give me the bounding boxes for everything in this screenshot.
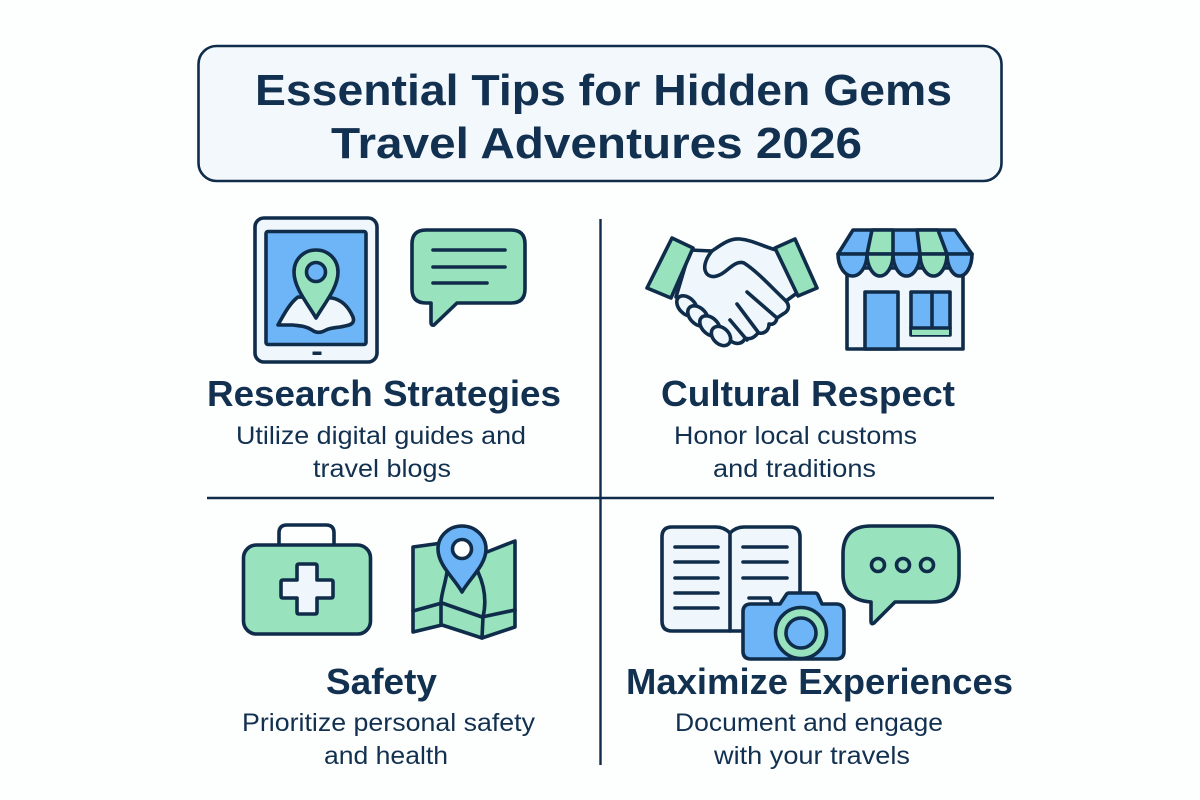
description: cultural respect: and traditions bbox=[713, 455, 876, 483]
icon: speech bubble with dots bbox=[843, 526, 959, 624]
description: cultural respect bbox=[674, 422, 917, 483]
icon: camera bbox=[743, 593, 844, 659]
icon: first aid kit bbox=[244, 525, 370, 634]
description: maximize experiences bbox=[675, 709, 943, 770]
icon: tablet with map pin bbox=[255, 218, 377, 362]
icon: handshake bbox=[647, 238, 817, 349]
description: research strategies bbox=[236, 422, 526, 483]
icon: speech bubble with lines bbox=[412, 230, 525, 325]
heading: maximize experiences: Maximize Experiences bbox=[626, 661, 1013, 702]
description: cultural respect: Honor local customs bbox=[674, 422, 917, 450]
description: maximize experiences: Document and engage bbox=[675, 709, 943, 737]
panel: cultural respect bbox=[647, 230, 972, 483]
title banner: Travel Adventures 2026 bbox=[331, 119, 862, 168]
description: safety bbox=[242, 709, 536, 770]
icon: open book bbox=[662, 527, 800, 631]
description: safety: Prioritize personal safety bbox=[242, 709, 536, 737]
description: safety: and health bbox=[324, 742, 448, 770]
icon: storefront bbox=[838, 230, 972, 349]
panel: research strategies bbox=[207, 218, 561, 483]
title banner bbox=[198, 46, 1002, 181]
description: maximize experiences: with your travels bbox=[713, 742, 910, 770]
panel: maximize experiences bbox=[626, 526, 1013, 770]
icon: folded map with pin bbox=[413, 526, 515, 638]
panel: safety bbox=[242, 525, 536, 770]
heading: cultural respect: Cultural Respect bbox=[661, 373, 955, 414]
heading: research strategies: Research Strategies bbox=[207, 373, 561, 414]
description: research strategies: travel blogs bbox=[313, 455, 451, 483]
description: research strategies: Utilize digital guides and bbox=[236, 422, 526, 450]
title banner: Essential Tips for Hidden Gems bbox=[255, 66, 952, 115]
heading: safety: Safety bbox=[326, 661, 437, 702]
